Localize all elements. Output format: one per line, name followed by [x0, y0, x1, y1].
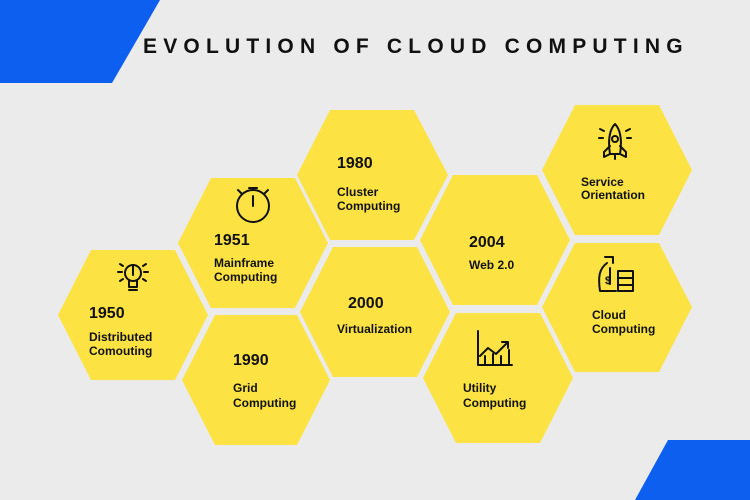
hex: Utility Computing: Computing — [463, 396, 526, 410]
hex: 1950 Distributed Computing: 1950 — [89, 305, 125, 322]
hex: 2004 Web 2.0: 2004 — [469, 234, 505, 251]
icon: light bulb — [118, 264, 148, 290]
hex: 1950 Distributed Computing: Comouting — [89, 344, 152, 358]
hex: 1951 Mainframe Computing: Computing — [214, 270, 277, 284]
hex: 1980 Cluster Computing: 1980 — [337, 155, 373, 172]
icon: rocket — [599, 124, 631, 159]
hex: Utility Computing: Utility — [463, 381, 497, 395]
hex: 1990 Grid Computing: Grid — [233, 381, 258, 395]
hex: 2000 Virtualization — [300, 247, 450, 377]
hex: Service Orientation: Service — [581, 175, 624, 189]
hex: 1951 Mainframe Computing — [178, 178, 328, 308]
blue corner shape bottom-right — [635, 440, 750, 500]
hex: 1990 Grid Computing: 1990 — [233, 352, 269, 369]
hex: 1980 Cluster Computing: Cluster — [337, 185, 379, 199]
icon: money bag and coins — [599, 257, 633, 291]
blue corner shape top-left — [0, 0, 160, 83]
hex: 2000 Virtualization: Virtualization — [337, 322, 412, 336]
icon: money bag and coins: $ — [605, 275, 611, 287]
hex: 2000 Virtualization: 2000 — [348, 295, 384, 312]
hex: 1980 Cluster Computing — [297, 110, 448, 240]
hex: 1951 Mainframe Computing: 1951 — [214, 232, 250, 249]
hex: Cloud Computing: Cloud — [592, 308, 626, 322]
hex: 1950 Distributed Computing: Distributed — [89, 330, 152, 344]
hex: 1950 Distributed Computing — [58, 250, 208, 380]
icon: growth chart — [478, 331, 512, 365]
hex: Service Orientation — [542, 105, 692, 235]
hex: 1990 Grid Computing — [182, 315, 330, 445]
hex: 1990 Grid Computing: Computing — [233, 396, 296, 410]
hex: 2004 Web 2.0: Web 2.0 — [469, 258, 514, 272]
hex: Cloud Computing: Computing — [592, 322, 655, 336]
hex: 1980 Cluster Computing: Computing — [337, 199, 400, 213]
icon: stopwatch — [237, 188, 269, 222]
hex: 2004 Web 2.0 — [420, 175, 570, 305]
hex: 1951 Mainframe Computing: Mainframe — [214, 256, 274, 270]
hex: Cloud Computing — [542, 243, 692, 372]
hex: Utility Computing — [423, 313, 573, 443]
title: EVOLUTION OF CLOUD COMPUTING — [143, 35, 689, 58]
hex: Service Orientation: Orientation — [581, 188, 645, 202]
